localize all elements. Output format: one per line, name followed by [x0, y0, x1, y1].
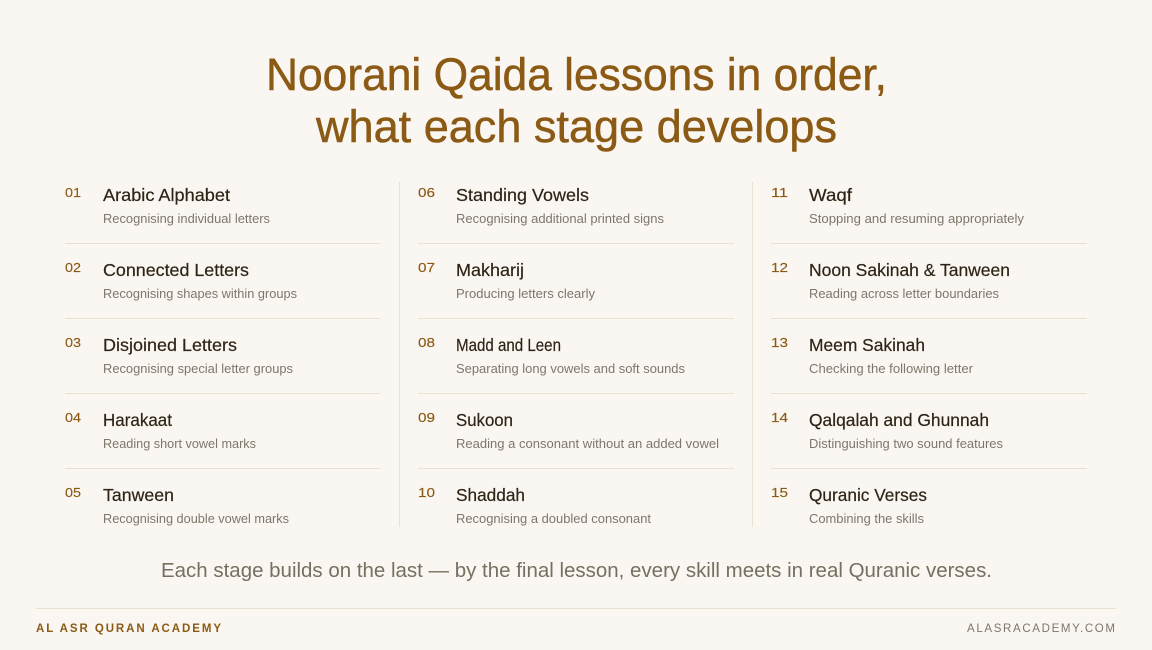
lesson 04: Harakaat [103, 410, 172, 430]
lesson 01: 01 [65, 185, 81, 200]
lesson 08: 08 [418, 335, 435, 350]
lesson 04: 04 [65, 410, 81, 425]
panel: lessons 01 to 05 [65, 185, 380, 526]
lesson 12: Reading across letter boundaries [809, 287, 999, 301]
lesson 11: Stopping and resuming appropriately [809, 212, 1025, 226]
lesson 05 [65, 485, 289, 526]
lesson 06: Recognising additional printed signs [456, 212, 664, 226]
lesson 14: Distinguishing two sound features [809, 437, 1003, 451]
lesson 12 [771, 260, 1010, 301]
title [266, 49, 887, 152]
lesson 06: Standing Vowels [456, 185, 589, 205]
lesson 11: Waqf [809, 185, 852, 205]
lesson 10: 10 [418, 485, 435, 500]
lesson 15 [771, 485, 927, 526]
lesson 13 [771, 335, 973, 376]
lesson 02: Recognising shapes within groups [103, 287, 297, 301]
lesson 02: Connected Letters [103, 260, 249, 280]
lesson 04 [65, 410, 256, 451]
lesson 08: Madd and Leen [456, 335, 561, 355]
lesson 11 [771, 185, 1025, 226]
lesson 15: 15 [771, 485, 788, 500]
panel: lessons 11 to 15 [771, 185, 1087, 526]
panel: lessons 06 to 10 [418, 185, 734, 526]
title: what each stage develops [315, 101, 837, 152]
lesson 14: 14 [771, 410, 788, 425]
lesson 05: Recognising double vowel marks [103, 512, 289, 526]
lesson 05: 05 [65, 485, 81, 500]
lesson 15: Quranic Verses [809, 485, 927, 505]
lesson 09 [418, 410, 719, 451]
lesson 07: Makharij [456, 260, 524, 280]
lesson 12: 12 [771, 260, 788, 275]
lesson 15: Combining the skills [809, 512, 924, 526]
lesson 03 [65, 335, 293, 376]
lesson 01: Recognising individual letters [103, 212, 270, 226]
lesson 03: Disjoined Letters [103, 335, 237, 355]
lesson 11: 11 [771, 185, 788, 200]
lesson 06: 06 [418, 185, 435, 200]
lesson 14 [771, 410, 1003, 451]
lesson 10: Recognising a doubled consonant [456, 512, 652, 526]
lesson 09: Sukoon [456, 410, 513, 430]
lesson 03: 03 [65, 335, 81, 350]
footer: academy name: AL ASR QURAN ACADEMY [36, 623, 221, 635]
title: Noorani Qaida lessons in order, [266, 49, 887, 100]
lesson 14: Qalqalah and Ghunnah [809, 410, 989, 430]
lesson 02 [65, 260, 297, 301]
lesson 13: 13 [771, 335, 788, 350]
lesson 04: Reading short vowel marks [103, 437, 256, 451]
closing statement: Each stage builds on the last — by the final lesson, every skill meets in real Quranic verses. [161, 560, 992, 582]
lesson 08: Separating long vowels and soft sounds [456, 362, 685, 376]
lesson 10 [418, 485, 652, 526]
lesson 02: 02 [65, 260, 81, 275]
lesson 07: 07 [418, 260, 435, 275]
lesson 01 [65, 185, 270, 226]
lesson 09: Reading a consonant without an added vowel [456, 437, 719, 451]
lesson 07: Producing letters clearly [456, 287, 596, 301]
lesson 10: Shaddah [456, 485, 525, 505]
lesson 06 [418, 185, 664, 226]
lesson 08 [418, 335, 685, 376]
lesson 07 [418, 260, 596, 301]
lesson 12: Noon Sakinah & Tanween [809, 260, 1010, 280]
footer: website: ALASRACADEMY.COM [967, 623, 1115, 635]
lesson 13: Checking the following letter [809, 362, 973, 376]
lesson 05: Tanween [103, 485, 174, 505]
lesson 01: Arabic Alphabet [103, 185, 230, 205]
lesson 03: Recognising special letter groups [103, 362, 293, 376]
lesson 09: 09 [418, 410, 435, 425]
lesson 13: Meem Sakinah [809, 335, 925, 355]
